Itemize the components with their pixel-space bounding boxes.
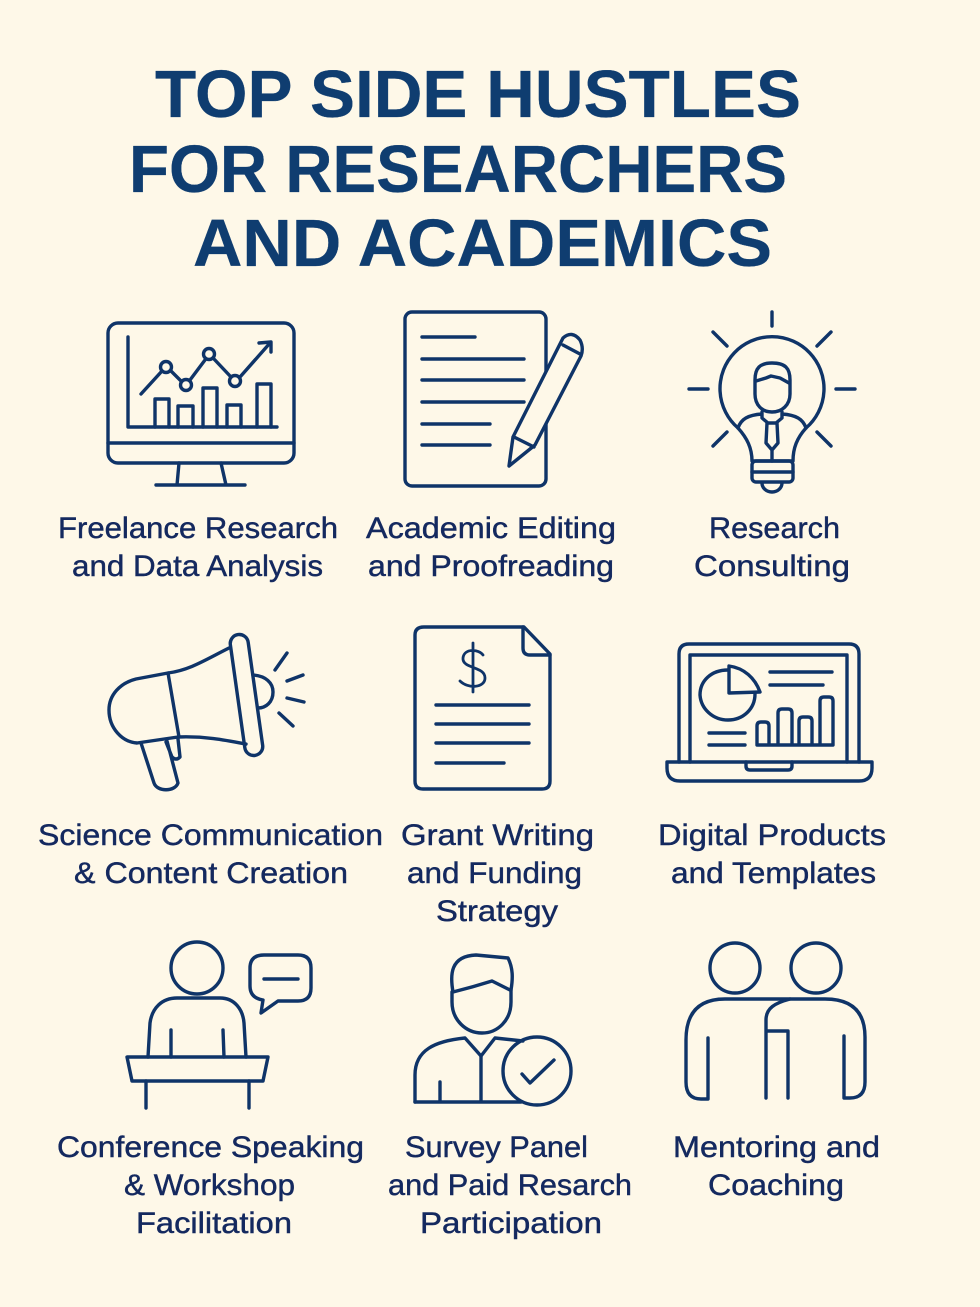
label: and Funding — [407, 857, 582, 890]
icon: two people — [686, 943, 865, 1099]
panel: mentoring and coaching — [673, 943, 880, 1202]
label: Consulting — [694, 550, 850, 583]
label: Participation — [420, 1207, 602, 1240]
label — [38, 819, 383, 890]
label: & Workshop — [124, 1169, 295, 1202]
title — [129, 57, 801, 281]
label: Science Communication — [38, 819, 383, 852]
label: Conference Speaking — [57, 1131, 364, 1164]
panel: grant writing and funding strategy — [401, 627, 594, 928]
icon: light bulb with person — [689, 312, 855, 492]
icon: document and pencil — [405, 312, 582, 486]
label: Survey Panel — [405, 1131, 588, 1164]
label: and Proofreading — [368, 550, 614, 583]
icon: person with check mark — [415, 955, 571, 1105]
label — [57, 1131, 364, 1240]
label: & Content Creation — [74, 857, 348, 890]
label: Research — [709, 512, 840, 545]
label: Facilitation — [136, 1207, 292, 1240]
label: Grant Writing — [401, 819, 594, 852]
title: TOP SIDE HUSTLES — [155, 57, 801, 132]
icon: monitor with chart — [108, 323, 294, 485]
panel: conference speaking — [57, 942, 364, 1240]
label: Academic Editing — [366, 512, 616, 545]
label: and Paid Resarch — [388, 1169, 632, 1202]
label: Strategy — [436, 895, 558, 928]
label: Digital Products — [658, 819, 886, 852]
panel: research consulting — [689, 312, 855, 583]
label — [694, 512, 850, 583]
label — [673, 1131, 880, 1202]
panel: survey panel and paid research participation — [388, 955, 632, 1240]
panel: digital products and templates — [658, 644, 886, 890]
label — [401, 819, 594, 928]
label — [58, 512, 338, 583]
icon: dollar document — [415, 627, 550, 789]
title: AND ACADEMICS — [193, 206, 772, 281]
label — [366, 512, 616, 583]
panel: academic editing and proofreading — [366, 312, 616, 583]
label: and Templates — [671, 857, 876, 890]
panel: science communication — [38, 633, 383, 890]
icon: megaphone — [109, 633, 304, 790]
label: and Data Analysis — [72, 550, 323, 583]
label: Mentoring and — [673, 1131, 880, 1164]
label: Coaching — [708, 1169, 844, 1202]
icon: speaker at podium — [127, 942, 311, 1108]
title: FOR RESEARCHERS — [129, 132, 787, 207]
icon: laptop dashboard — [667, 644, 872, 781]
label — [388, 1131, 632, 1240]
label — [658, 819, 886, 890]
panel: freelance research and data analysis — [58, 323, 338, 583]
label: Freelance Research — [58, 512, 338, 545]
